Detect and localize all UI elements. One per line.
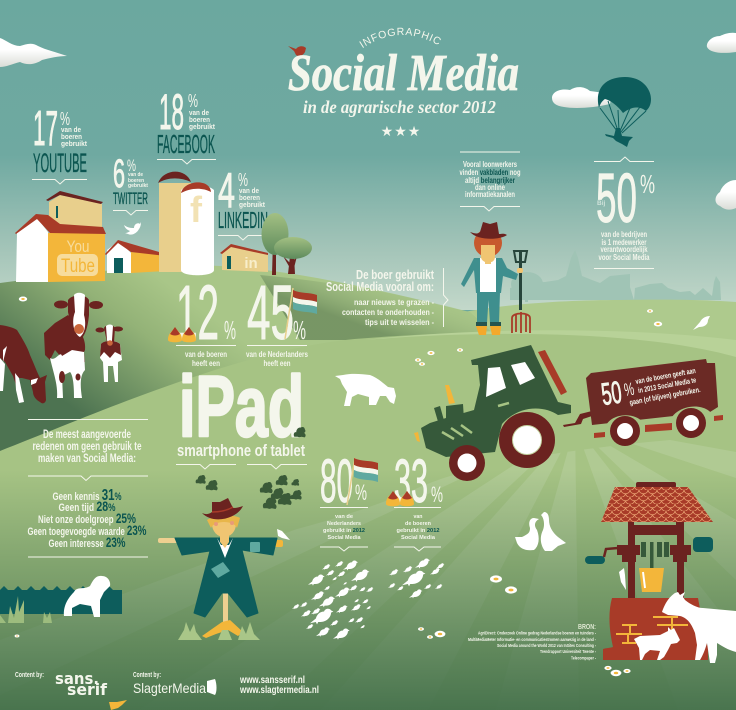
sources: BRON: (578, 624, 596, 631)
heading: iPad: smartphone of tablet (177, 441, 305, 460)
stat: 50 percent staff: % (640, 169, 655, 199)
stat: 33 percent: de boeren (405, 521, 431, 527)
flock of white birds right (388, 558, 444, 598)
stat: linkedin: gebruikt (239, 200, 265, 209)
flag pole (285, 288, 293, 339)
title: Social Media (288, 45, 519, 102)
stat: youtube (32, 102, 87, 184)
barn: linkedin: in (244, 255, 258, 272)
stat: twitter: gebruikt (128, 183, 148, 189)
flower (647, 309, 653, 313)
footer (15, 669, 319, 710)
trailer text: % (623, 379, 635, 400)
flower on hill (654, 321, 662, 327)
barn: youtube: Tube (61, 256, 95, 277)
sources: Telecompaper - (571, 656, 596, 660)
sources (468, 624, 597, 660)
heading: iPad: iPad (179, 359, 304, 455)
fence grass (0, 596, 52, 623)
goat on hill (335, 374, 396, 406)
trailer (563, 359, 723, 446)
text: TWITTER (113, 189, 148, 208)
stat: 80 percent: gebruikt in 2012 (323, 528, 365, 534)
icon: yellow bird (109, 700, 127, 710)
stat: youtube: % (60, 109, 70, 129)
stat: linkedin: van de (239, 186, 259, 195)
callout: loonwerkers: altijd belangrijker (465, 176, 515, 185)
cloud behind parachute (552, 87, 612, 108)
small cow (96, 324, 123, 382)
callout: loonwerkers: Vooral loonwerkers (463, 160, 517, 169)
stat: facebook: 18 (159, 84, 184, 140)
tractor body (421, 345, 571, 457)
cloud top right (707, 33, 736, 53)
text: redenen panel: Niet onze doelgroep 25% (38, 510, 136, 526)
stat: 33 percent (386, 447, 443, 551)
stat: 12 percent ipad: 12 (176, 270, 219, 356)
text: redenen panel: Geen toegevoegde waarde 23% (28, 522, 147, 538)
stat: twitter: % (127, 156, 136, 175)
icon: dutch flag (354, 458, 378, 482)
trailer text: gaan (of blijven) gebruiken. (629, 385, 701, 407)
stat: youtube: gebruikt (61, 139, 87, 148)
callout: loonwerkers (460, 152, 521, 211)
flock of white birds left (292, 560, 373, 640)
stat: 80 percent: % (355, 480, 367, 505)
stat: facebook (157, 84, 216, 164)
icon: clogs (168, 327, 196, 342)
stat: 45 percent: 45 (247, 270, 294, 356)
subtitle: in de agrarische sector 2012 (303, 97, 496, 117)
stat: 50 percent staff: 50 (596, 159, 637, 237)
stat: 45 percent: heeft een (264, 359, 291, 368)
text: redenen panel: maken van Social Media: (38, 453, 136, 465)
footer: www.slagtermedia.nl (239, 684, 319, 696)
stat: facebook: boeren (189, 115, 210, 124)
text: boer gebruikt social media: tips uit te wisselen - (365, 317, 434, 327)
stat: 12 percent ipad: van de boeren (185, 350, 227, 359)
silos: facebook: f (190, 189, 203, 230)
stat: twitter: 6 (113, 152, 125, 196)
trailer text: van de boeren geeft aan (635, 366, 697, 386)
small wheel (449, 445, 485, 481)
footer: Content by: (15, 672, 44, 679)
stat: 50 percent staff (594, 157, 655, 268)
icon: slagtermedia (207, 679, 216, 695)
barn: youtube (15, 191, 106, 282)
water well (585, 482, 713, 660)
text: FACEBOOK (157, 129, 215, 159)
stat: youtube: van de (61, 125, 81, 134)
trailer text: 50 (599, 374, 624, 412)
text: redenen panel: Geen tijd 28% (58, 498, 116, 514)
barn: youtube: You (66, 237, 90, 256)
stat: twitter: boeren (128, 178, 145, 184)
text: boer gebruikt social media: naar nieuws te grazen - (354, 297, 434, 307)
callout: loonwerkers: dan online (475, 183, 505, 192)
text: redenen panel: Geen interesse 23% (48, 534, 126, 550)
stat: 33 percent: Social Media (401, 535, 436, 541)
silos: facebook (158, 172, 214, 275)
sky background (0, 0, 736, 310)
title kicker: INFOGRAPHIC (359, 28, 441, 48)
text: boer gebruikt social media (326, 268, 448, 327)
daisies field (15, 296, 631, 676)
exhaust (434, 404, 464, 425)
stat: 80 percent (320, 447, 378, 551)
white bird on hill (693, 316, 710, 330)
text: redenen panel (28, 420, 148, 557)
stat: facebook: % (188, 91, 198, 111)
footer: SlagterMedia (133, 680, 206, 696)
sources: Social Media around the World 2012 van InSites Consulting - (497, 643, 596, 648)
stat: linkedin: % (238, 170, 248, 190)
footer: serif (67, 680, 108, 699)
text: boer gebruikt social media: contacten te onderhouden - (342, 307, 434, 317)
left cow (0, 325, 47, 403)
cloud right (716, 180, 736, 210)
icon: dutch flag (293, 290, 317, 314)
fence (0, 586, 122, 614)
dog (64, 576, 110, 617)
frogs group large (260, 475, 302, 509)
windows (486, 362, 535, 397)
stat: 45 percent: % (293, 315, 306, 345)
farmer (461, 222, 530, 335)
left back hill (0, 266, 500, 460)
sources: AgriDirect: Onderzoek Online gedrag Nederlandse boeren en tuinders - (478, 630, 596, 636)
tractor halo (448, 422, 562, 461)
stat: linkedin: 4 (218, 164, 235, 218)
tractor (414, 345, 571, 481)
footer: Content by: (133, 672, 161, 679)
text: YOUTUBE (33, 148, 87, 178)
icon: twitter bird (124, 222, 141, 235)
kid goat (634, 627, 680, 660)
right back hill (430, 300, 736, 400)
flag pole (347, 458, 355, 505)
trailer text (599, 366, 701, 412)
stat: 50 percent staff: Bij (597, 200, 606, 207)
stat: linkedin (218, 164, 268, 240)
stat: facebook: van de (189, 108, 209, 117)
stat: 12 percent ipad: heeft een (192, 359, 220, 368)
stat: youtube: 17 (33, 102, 58, 156)
stat: 33 percent: 33 (394, 447, 428, 515)
text: redenen panel: De meest aangevoerde (43, 429, 131, 441)
icon: clogs (386, 491, 414, 506)
icon: parachute (598, 77, 651, 147)
barn: twitter (105, 240, 166, 273)
text: redenen panel: Geen kennis 31% (52, 487, 122, 504)
text: redenen panel: redenen om geen gebruik te (32, 441, 142, 453)
stat: 80 percent: 80 (320, 447, 353, 515)
callout: loonwerkers: vinden vakbladen nog (460, 168, 521, 177)
stat: youtube: boeren (61, 132, 82, 141)
geese (515, 512, 566, 551)
stat: twitter (113, 152, 148, 215)
stat: 50 percent staff: van de bedrijven (601, 230, 647, 239)
scarecrow (158, 498, 290, 640)
stat: 12 percent ipad (168, 270, 236, 368)
stat: 80 percent: Social Media (328, 535, 361, 541)
big goat (662, 592, 736, 663)
stat: 80 percent: van de (335, 514, 354, 520)
stat: linkedin: boeren (239, 193, 260, 202)
three stars: ★★★ (381, 124, 421, 140)
callout: loonwerkers: informatiekanalen (465, 190, 515, 199)
stat: 33 percent: % (431, 482, 443, 507)
field rays (144, 440, 736, 587)
text: LINKEDIN (218, 207, 268, 233)
ground shading (0, 470, 736, 710)
sources: Trendrapport Universiteit Twente - (540, 649, 596, 654)
stat: 45 percent: van de Nederlanders (246, 350, 309, 359)
big cow (44, 293, 103, 398)
barn: linkedin (220, 244, 268, 272)
town trees (511, 272, 543, 302)
frog on iPad (294, 427, 306, 437)
footer: www.sansserif.nl (239, 674, 305, 686)
big wheel (499, 412, 555, 468)
front hill (0, 332, 736, 710)
stat: 50 percent staff: is 1 medewerker (602, 238, 646, 247)
stat: facebook: gebruikt (189, 122, 215, 131)
footer: sans. (55, 669, 99, 688)
stat: 33 percent: van (414, 514, 423, 520)
heading: iPad (176, 359, 307, 469)
stat: 80 percent: Nederlanders (327, 521, 361, 527)
icon: red bird (288, 46, 306, 56)
stat: 33 percent: gebruikt in 2012 (396, 528, 440, 534)
text: boer gebruikt social media: De boer gebruikt (356, 268, 435, 282)
woodpecker (619, 568, 626, 590)
cloud top left (0, 38, 67, 67)
title block (288, 28, 519, 140)
town silhouette (510, 250, 721, 300)
trees (262, 213, 312, 275)
stat: 50 percent staff: voor Social Media (598, 253, 650, 262)
stat: twitter: van de (128, 172, 143, 178)
trailer text: in 2013 Social Media te (637, 375, 697, 395)
sources: MultiMediaMeter Informatie- en communicatiestromen aanwezig in de land - (468, 637, 597, 642)
frogs group small (196, 475, 218, 490)
text: boer gebruikt social media: Social Media vooral om: (326, 280, 434, 294)
stat: 12 percent ipad: % (224, 315, 236, 345)
stat: 50 percent staff: verantwoordelijk (600, 245, 648, 254)
